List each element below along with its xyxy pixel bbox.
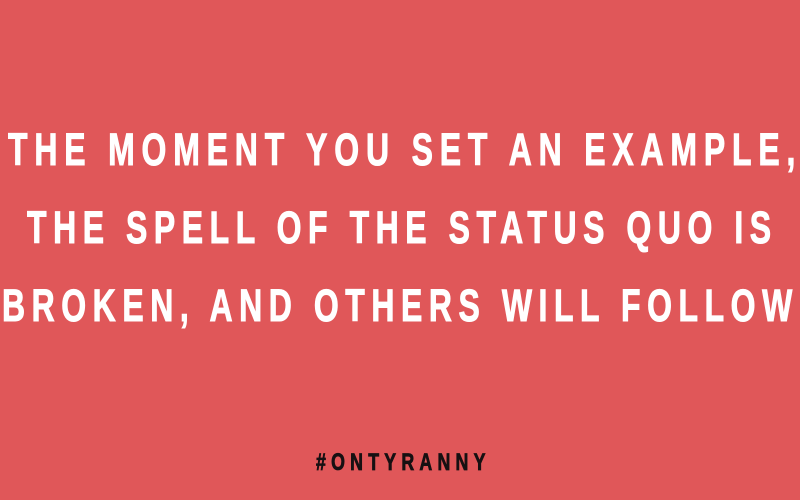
- quote line 3: BROKEN, AND OTHERS WILL FOLLOW: [2, 282, 792, 331]
- quote line 2: THE SPELL OF THE STATUS QUO IS: [27, 204, 771, 253]
- quote: [2, 126, 795, 331]
- quote line 1: THE MOMENT YOU SET AN EXAMPLE,: [8, 126, 795, 175]
- hashtag: #ONTYRANNY: [316, 450, 485, 476]
